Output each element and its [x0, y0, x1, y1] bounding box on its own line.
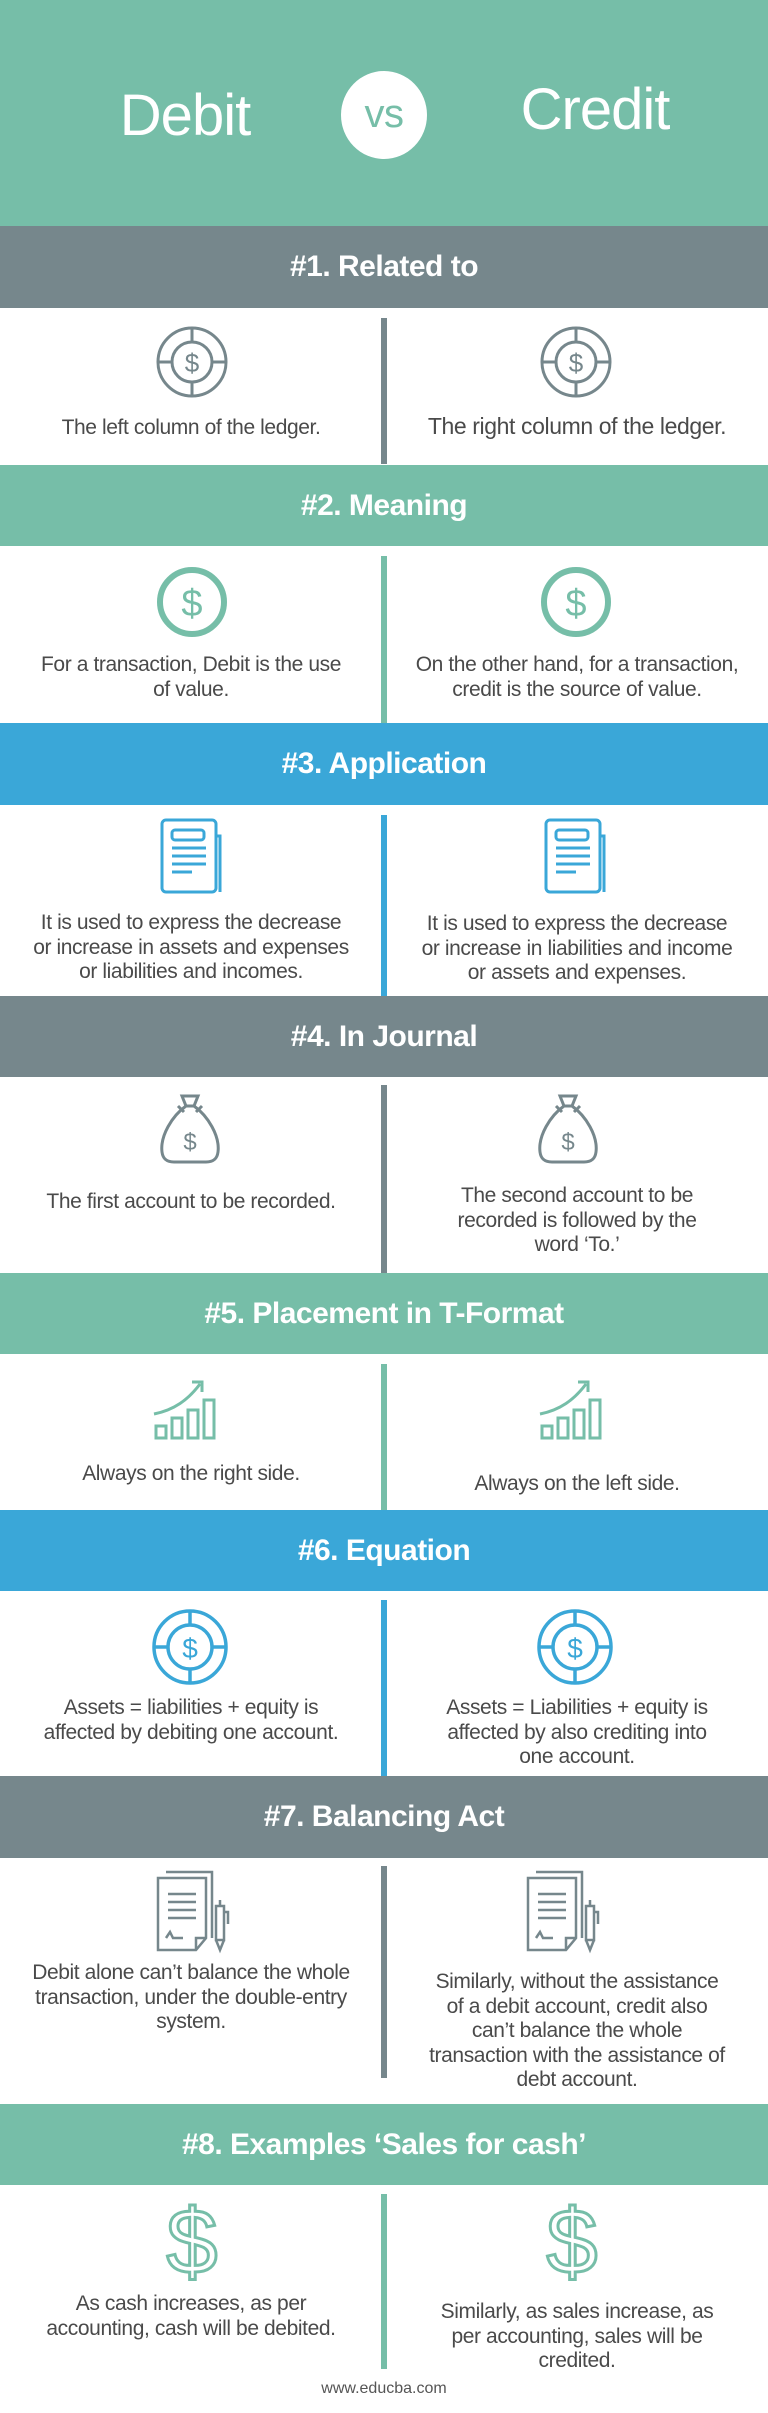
- text 7 left: system.: [156, 2010, 226, 2033]
- icon: document right: [544, 818, 606, 894]
- icon: growth chart left: [154, 1380, 216, 1440]
- divider 1: [381, 318, 387, 464]
- icon: dollar sign right: $: [546, 2191, 598, 2293]
- text 7 right: debt account.: [517, 2068, 637, 2091]
- icon: target dollar blue right: [537, 1609, 613, 1685]
- text 6 right: [446, 1696, 708, 1768]
- title: Credit: Credit: [521, 77, 669, 142]
- text 3 right: or assets and expenses.: [468, 961, 686, 984]
- divider 7: [381, 1866, 387, 2078]
- vs circle: [341, 71, 427, 159]
- text 6 left: [44, 1696, 338, 1744]
- heading 4: #4. In Journal: [291, 1020, 477, 1053]
- heading 8: #8. Examples ‘Sales for cash’: [182, 2128, 586, 2161]
- heading 2: [0, 465, 768, 546]
- text 7 right: of a debit account, credit also: [447, 1995, 707, 2018]
- text 2 right: credit is the source of value.: [452, 678, 702, 701]
- text 4 right: The second account to be: [461, 1184, 693, 1207]
- heading 1: [0, 226, 768, 308]
- icon: money bag left: [160, 1094, 220, 1164]
- heading 3: [0, 723, 768, 805]
- text 8 left: As cash increases, as per: [76, 2292, 306, 2315]
- heading 4: [0, 996, 768, 1077]
- icon: coin right: $: [565, 583, 587, 625]
- heading 6: #6. Equation: [298, 1534, 470, 1567]
- heading 5: [0, 1273, 768, 1354]
- icon: target dollar right: [540, 326, 612, 398]
- divider 4: [381, 1085, 387, 1273]
- icon: contract pen right: [526, 1870, 600, 1954]
- text 7 right: can’t balance the whole: [472, 2019, 682, 2042]
- text 7 left: Debit alone can’t balance the whole: [32, 1961, 350, 1984]
- text 3 right: or increase in liabilities and income: [422, 937, 732, 960]
- heading 6: [0, 1510, 768, 1591]
- text 6 left: affected by debiting one account.: [44, 1721, 338, 1744]
- heading 5: #5. Placement in T-Format: [204, 1297, 564, 1330]
- divider 3: [381, 815, 387, 996]
- heading 1: #1. Related to: [290, 250, 478, 283]
- text 7 left: transaction, under the double-entry: [35, 1986, 347, 2009]
- heading 8: [0, 2104, 768, 2185]
- text 7 right: [429, 1970, 726, 2091]
- text 3 right: It is used to express the decrease: [427, 912, 727, 935]
- text 6 right: one account.: [519, 1745, 635, 1768]
- text 8 left: [46, 2292, 336, 2340]
- text 6 right: affected by also crediting into: [447, 1721, 707, 1744]
- text 8 right: per accounting, sales will be: [451, 2325, 703, 2348]
- text 2 right: [416, 653, 738, 701]
- vs circle: vs: [364, 92, 404, 136]
- text 8 right: [441, 2300, 713, 2372]
- footer: www.educba.com: [321, 2380, 447, 2397]
- text 2 left: of value.: [153, 678, 229, 701]
- text 2 right: On the other hand, for a transaction,: [416, 653, 738, 676]
- divider 8: [381, 2194, 387, 2369]
- text 4 right: word ‘To.’: [535, 1233, 619, 1256]
- text 4 right: recorded is followed by the: [457, 1209, 696, 1232]
- text 3 left: or liabilities and incomes.: [79, 960, 303, 983]
- icon: coin right: [541, 567, 611, 637]
- text 7 left: [32, 1961, 350, 2033]
- icon: money bag right: [538, 1094, 598, 1164]
- text 3 right: [422, 912, 732, 984]
- icon: target dollar blue left: $: [182, 1633, 198, 1664]
- text 7 right: Similarly, without the assistance: [436, 1970, 718, 1993]
- text 8 left: accounting, cash will be debited.: [46, 2317, 336, 2340]
- text 2 left: [41, 653, 341, 701]
- icon: target dollar blue right: $: [567, 1633, 583, 1664]
- icon: money bag left: $: [183, 1129, 197, 1156]
- icon: target dollar right: $: [569, 348, 584, 378]
- text 1 left: The left column of the ledger.: [62, 416, 320, 439]
- icon: target dollar left: [156, 326, 228, 398]
- heading 7: #7. Balancing Act: [264, 1800, 504, 1833]
- icon: coin left: [157, 567, 227, 637]
- text 4 left: The first account to be recorded.: [46, 1190, 336, 1213]
- divider 2: [381, 556, 387, 723]
- icon: coin left: $: [181, 583, 203, 625]
- text 6 right: Assets = Liabilities + equity is: [446, 1696, 708, 1719]
- icon: contract pen left: [156, 1870, 230, 1954]
- text 3 left: or increase in assets and expenses: [33, 936, 349, 959]
- text 8 right: credited.: [539, 2349, 615, 2372]
- text 1 right: The right column of the ledger.: [428, 413, 726, 439]
- text 4 right: [457, 1184, 696, 1256]
- text 2 left: For a transaction, Debit is the use: [41, 653, 341, 676]
- icon: money bag right: $: [561, 1129, 575, 1156]
- icon: target dollar blue left: [152, 1609, 228, 1685]
- text 3 left: It is used to express the decrease: [41, 911, 341, 934]
- heading 3: #3. Application: [282, 747, 486, 780]
- text 5 right: Always on the left side.: [474, 1472, 680, 1495]
- text 6 left: Assets = liabilities + equity is: [64, 1696, 318, 1719]
- text 8 right: Similarly, as sales increase, as: [441, 2300, 713, 2323]
- icon: target dollar left: $: [185, 348, 200, 378]
- heading 7: [0, 1776, 768, 1858]
- divider 6: [381, 1600, 387, 1776]
- divider 5: [381, 1364, 387, 1510]
- title: Debit: Debit: [120, 83, 250, 148]
- icon: growth chart right: [540, 1380, 602, 1440]
- heading 2: #2. Meaning: [301, 489, 467, 522]
- text 7 right: transaction with the assistance of: [429, 2044, 725, 2067]
- icon: document left: [160, 818, 222, 894]
- header: [0, 0, 768, 226]
- icon: dollar sign left: $: [166, 2191, 218, 2293]
- text 5 left: Always on the right side.: [82, 1462, 300, 1485]
- text 3 left: [33, 911, 349, 983]
